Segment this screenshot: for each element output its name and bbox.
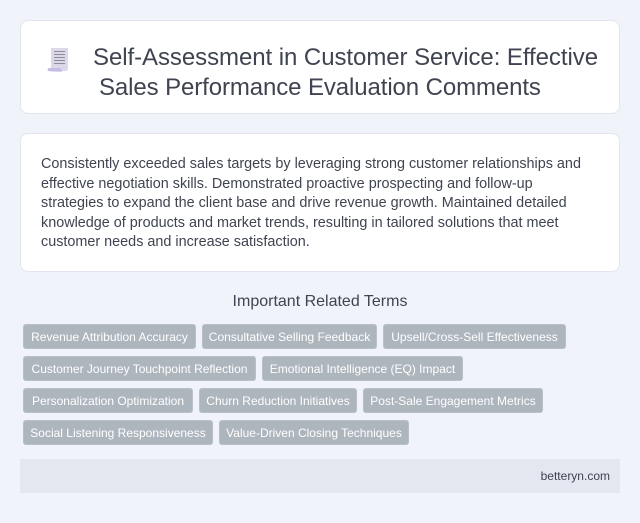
tag: Consultative Selling Feedback xyxy=(209,330,370,344)
tag: Customer Journey Touchpoint Reflection xyxy=(32,362,247,376)
title xyxy=(93,44,598,101)
tag: Upsell/Cross-Sell Effectiveness xyxy=(391,330,558,344)
tag xyxy=(219,420,409,445)
tag: Emotional Intelligence (EQ) Impact xyxy=(270,362,455,376)
related terms heading: Important Related Terms xyxy=(233,293,407,310)
tag xyxy=(23,388,193,413)
tag xyxy=(23,324,196,349)
tag xyxy=(199,388,357,413)
icon: document scroll xyxy=(48,48,68,72)
tag: Personalization Optimization xyxy=(32,394,184,408)
tag: Value-Driven Closing Techniques xyxy=(226,426,402,440)
summary text: Consistently exceeded sales targets by leveraging strong customer relationships and xyxy=(41,156,581,172)
summary text: effective negotiation skills. Demonstrated proactive prospecting and follow-up xyxy=(41,176,533,192)
summary text: knowledge of products and market trends, resulting in tailored solutions that meet xyxy=(41,215,559,231)
related terms tags xyxy=(23,324,566,445)
tag: Churn Reduction Initiatives xyxy=(206,394,350,408)
summary panel xyxy=(20,133,620,272)
tag: Post-Sale Engagement Metrics xyxy=(370,394,536,408)
summary text: strategies to expand the client base and drive revenue growth. Maintained detailed xyxy=(41,195,567,211)
tag: Social Listening Responsiveness xyxy=(30,426,206,440)
tag xyxy=(23,356,256,381)
tag xyxy=(383,324,566,349)
summary text xyxy=(41,156,581,250)
summary text: customer needs and increase satisfaction. xyxy=(41,234,310,250)
tag: Revenue Attribution Accuracy xyxy=(31,330,188,344)
tag xyxy=(363,388,543,413)
tag xyxy=(202,324,377,349)
title: Sales Performance Evaluation Comments xyxy=(99,74,541,101)
header panel xyxy=(20,20,620,114)
footer source: betteryn.com xyxy=(541,469,610,483)
title: Self-Assessment in Customer Service: Effective xyxy=(93,44,598,71)
footer bar xyxy=(20,459,620,493)
tag xyxy=(262,356,463,381)
tag xyxy=(23,420,213,445)
